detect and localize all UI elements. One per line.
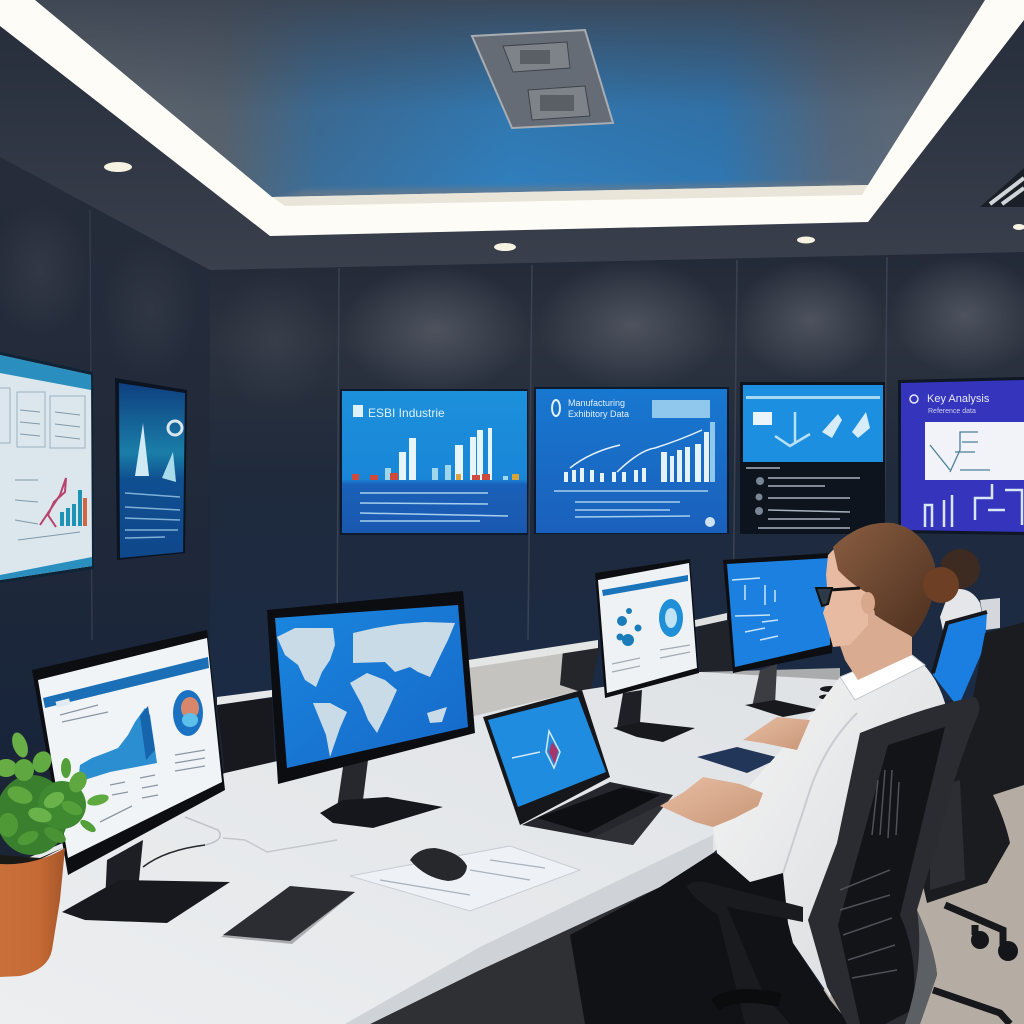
torso and sleeve — [713, 653, 945, 997]
chair back with blue screen — [933, 612, 987, 707]
chair back frame — [808, 697, 979, 1024]
stand — [62, 840, 230, 923]
ceiling spotlights — [104, 162, 1024, 251]
hand on desk — [743, 717, 810, 750]
world map landmasses — [277, 622, 455, 757]
wheels and base — [945, 905, 1018, 961]
area chart — [78, 708, 157, 782]
wall screen: purple diagram panel — [898, 377, 1024, 535]
soil — [0, 847, 65, 866]
papers and mouse — [350, 846, 580, 911]
office chair front — [687, 697, 1010, 1024]
laptop — [483, 690, 673, 845]
ceiling — [0, 0, 1024, 275]
armrest — [687, 882, 803, 1024]
hand on keyboard — [660, 777, 763, 827]
stand — [320, 760, 443, 828]
colleague in background — [940, 549, 1000, 640]
neck — [838, 600, 912, 680]
legs — [570, 853, 850, 1024]
wall screen: bar and line chart: Exhibitory Data — [568, 409, 629, 419]
ear — [861, 592, 875, 614]
cables — [143, 817, 337, 867]
face — [823, 545, 868, 647]
tablet on desk — [221, 886, 355, 944]
wall screen: bar and line chart — [534, 387, 729, 534]
second office chair — [915, 612, 1024, 961]
left wall — [0, 157, 210, 760]
plant with pot — [0, 730, 110, 977]
wall screen: dark info panel — [740, 382, 885, 534]
back wall — [210, 252, 1024, 700]
glasses — [816, 588, 860, 606]
wall screen: left dashboard — [0, 352, 94, 583]
hair and bun — [833, 523, 935, 637]
notebook on desk — [697, 747, 780, 773]
leaves — [0, 730, 110, 855]
wall screen: city skyline chart — [340, 389, 528, 535]
monitor: analytics left — [32, 630, 230, 923]
wall screen: portrait panel — [115, 378, 187, 560]
recessed blue ceiling panel — [30, 0, 990, 200]
mesh — [838, 727, 945, 1024]
right vent — [980, 168, 1024, 207]
mouse — [410, 848, 467, 881]
pot — [0, 848, 65, 977]
chair base — [933, 990, 1010, 1024]
floor — [330, 775, 1024, 1024]
wall screen: purple diagram panel: Reference data — [928, 408, 976, 415]
ceiling vent — [472, 30, 613, 128]
monitor: blue display — [723, 553, 832, 717]
donut chart — [173, 690, 203, 736]
monitor: world map — [267, 591, 475, 828]
monitor: white dashboard — [595, 559, 699, 742]
back desk partition — [217, 613, 840, 775]
collar — [840, 650, 925, 700]
LED light strip — [0, 0, 1024, 236]
white desk — [0, 672, 860, 1024]
wall screen: city skyline chart: ESBI Industrie — [368, 406, 445, 420]
seated woman — [570, 523, 959, 1024]
wall screen: bar and line chart: Manufacturing — [568, 398, 625, 408]
small desk items — [819, 686, 840, 700]
wall screen: purple diagram panel: Key Analysis — [927, 393, 990, 405]
